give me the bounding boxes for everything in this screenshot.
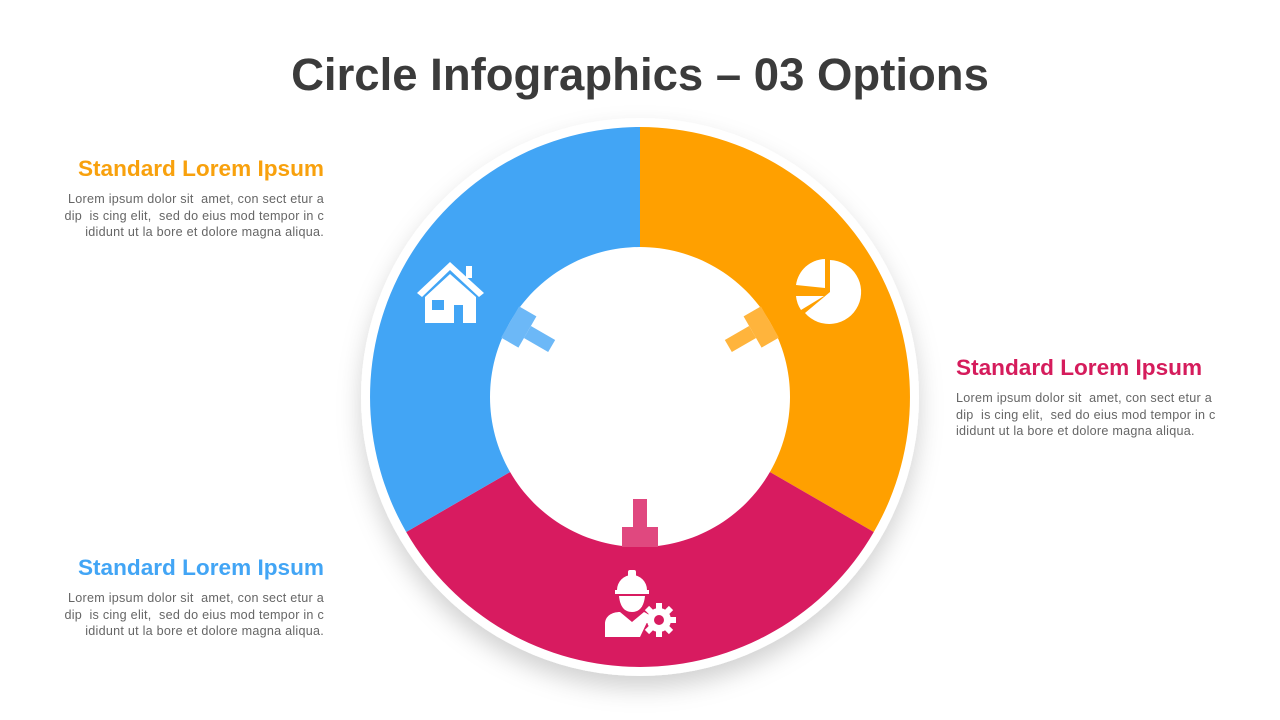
icon: pie chart: [796, 259, 861, 324]
text block: bottom-left: [64, 555, 324, 638]
text block: top-left: Lorem ipsum dolor sit amet, con sect etur a: [68, 192, 324, 206]
text block: top-left: dip is cing elit, sed do eius mod tempor in c: [64, 208, 324, 222]
text block: right: [956, 355, 1216, 438]
icon: worker with gear: [605, 570, 676, 637]
text block: top-left: Standard Lorem Ipsum: [78, 156, 324, 181]
title: Circle Infographics – 03 Options: [291, 49, 989, 100]
segment: blue: [370, 127, 640, 532]
tab: magenta: [622, 499, 658, 547]
text block: bottom-left: Standard Lorem Ipsum: [78, 555, 324, 580]
text block: top-left: ididunt ut la bore et dolore magna aliqua.: [85, 225, 324, 239]
text block: bottom-left: ididunt ut la bore et dolore magna aliqua.: [85, 624, 324, 638]
text block: top-left: [64, 156, 324, 239]
text block: right: dip is cing elit, sed do eius mod tempor in c: [956, 408, 1216, 422]
text block: bottom-left: dip is cing elit, sed do eius mod tempor in c: [64, 608, 324, 622]
text block: right: Lorem ipsum dolor sit amet, con sect etur a: [956, 391, 1212, 405]
segment: magenta: [406, 472, 874, 667]
icon: house: [417, 262, 484, 323]
segment: orange: [640, 127, 910, 532]
tab: blue: [501, 306, 561, 362]
text block: right: ididunt ut la bore et dolore magna aliqua.: [956, 424, 1195, 438]
tab: orange: [719, 306, 779, 362]
text block: bottom-left: Lorem ipsum dolor sit amet, con sect etur a: [68, 591, 324, 605]
text block: right: Standard Lorem Ipsum: [956, 355, 1202, 380]
